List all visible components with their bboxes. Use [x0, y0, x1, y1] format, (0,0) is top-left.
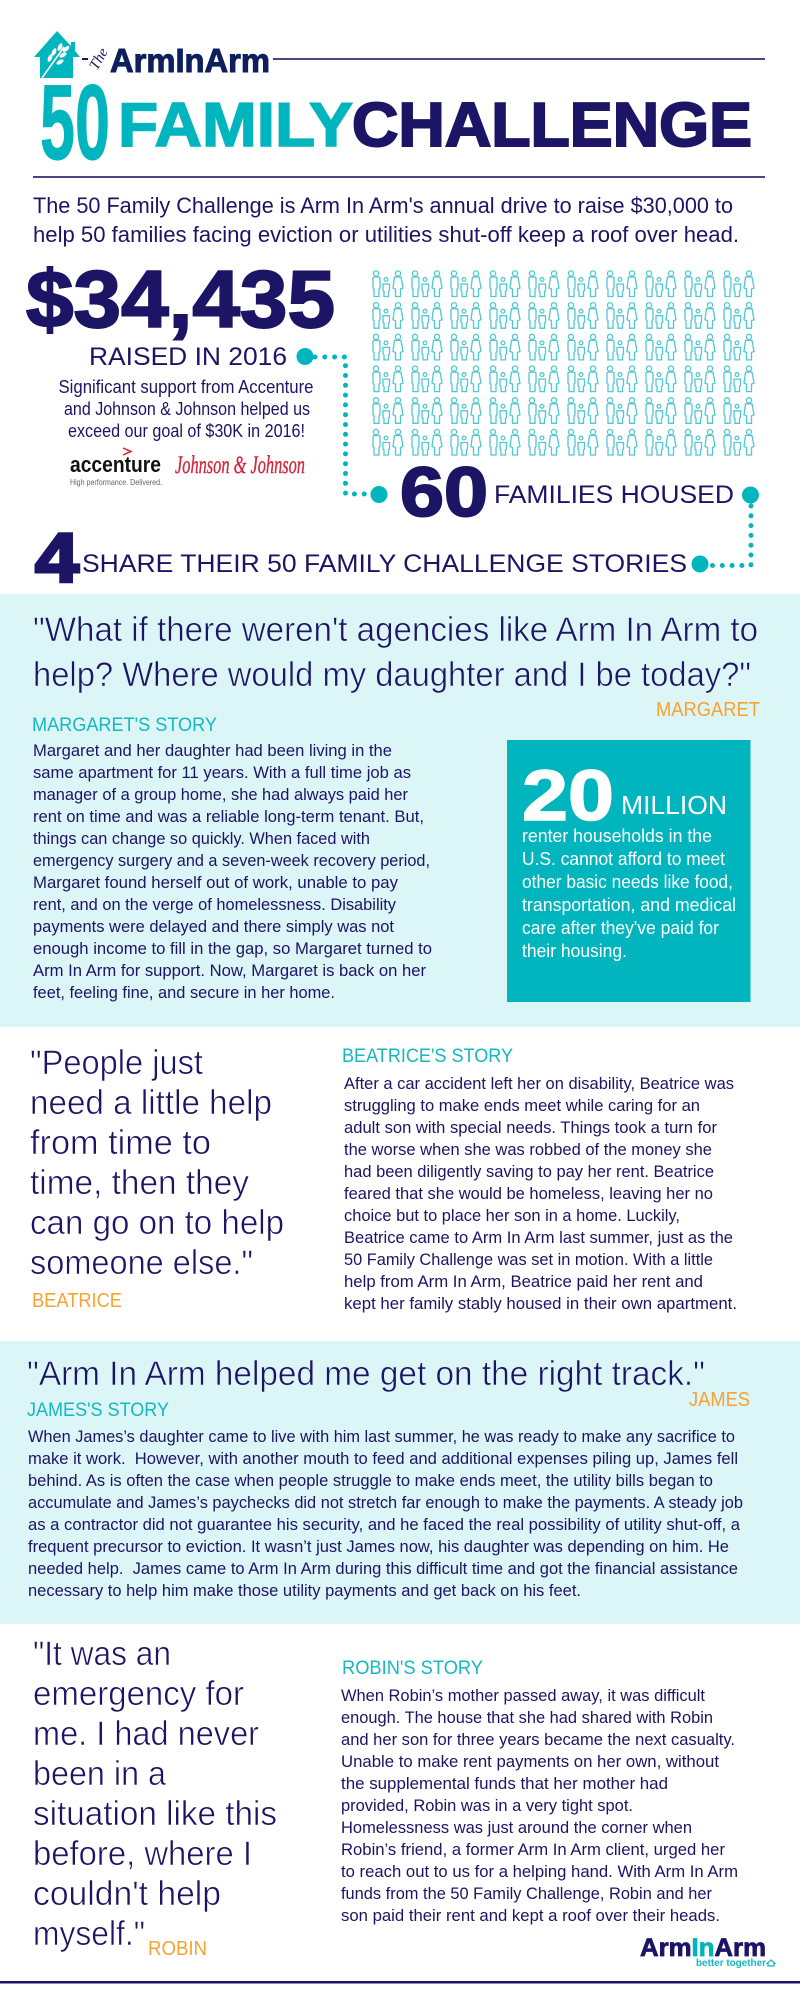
intro text: help 50 families facing eviction or utilities shut-off keep a roof over head.: [33, 222, 739, 247]
big 50: 50: [40, 62, 110, 182]
heading: James's story: JAMES'S STORY: [27, 1400, 169, 1421]
story text: Margaret: payments were delayed and there simply was not: [33, 918, 394, 936]
CHALLENGE: CHALLENGE: [352, 91, 752, 160]
callout: 20 million: transportation, and medical: [522, 895, 736, 915]
attribution: Beatrice: BEATRICE: [32, 1290, 122, 1312]
story text: James: frequent precursor to eviction. It wasn’t just James now, his daughter was depending on him. He: [28, 1538, 729, 1556]
story text: James: accumulate and James’s paychecks did not stretch far enough to make the payments. A steady job: [28, 1494, 743, 1512]
connector: raised to families: [296, 348, 388, 503]
callout: 20 million: their housing.: [522, 941, 627, 961]
story text: Beatrice: feared that she would be homeless, leaving her no: [344, 1185, 713, 1203]
story text: Beatrice: help from Arm In Arm, Beatrice paid her rent and: [344, 1273, 703, 1291]
quote: Margaret: "What if there weren't agencies like Arm In Arm to: [33, 611, 758, 649]
story text: James: as a contractor did not guarantee his security, and he faced the real possibility of utility shut-off, a: [28, 1516, 741, 1534]
callout: 20 million: [507, 740, 750, 1002]
quote: Robin: emergency for: [33, 1675, 244, 1713]
story text: Beatrice: After a car accident left her on disability, Beatrice was: [344, 1075, 734, 1093]
story text: Margaret: rent, and on the verge of homelessness. Disability: [33, 896, 397, 914]
story text: James: needed help. James came to Arm In Arm during this difficult time and got the financial assistance: [28, 1560, 738, 1578]
panel: Margaret: [0, 594, 800, 1027]
story text: Robin: Robin’s friend, a former Arm In Arm client, urged her: [341, 1841, 726, 1859]
story text: James: behind. As is often the case when people struggle to make ends meet, the utility bills began to: [28, 1472, 713, 1490]
story text: Robin: son paid their rent and kept a roof over their heads.: [341, 1907, 720, 1925]
stat: 60 families housed: [400, 453, 734, 531]
logo: Arm In Arm better together: better together: [696, 1957, 766, 1969]
attribution: Margaret: MARGARET: [656, 699, 760, 721]
story text: Beatrice: had been diligently saving to pay her rent. Beatrice: [344, 1163, 714, 1181]
story text: Beatrice: adult son with special needs. Things took a turn for: [344, 1119, 717, 1137]
story text: James: When James’s daughter came to live with him last summer, he was ready to make any sacrifice to: [28, 1428, 735, 1446]
logo: Johnson & Johnson: Johnson & Johnson: [175, 452, 305, 479]
connector: families to stories: [692, 486, 759, 572]
story text: Robin: provided, Robin was in a very tight spot.: [341, 1797, 633, 1815]
sponsor note: exceed our goal of $30K in 2016!: [68, 421, 305, 441]
story text: Margaret: emergency surgery and a seven-week recovery period,: [33, 852, 430, 870]
stat: 4 share their stories: 4: [35, 519, 79, 597]
intro text: The 50 Family Challenge is Arm In Arm's annual drive to raise $30,000 to: [33, 193, 733, 218]
story text: Robin: funds from the 50 Family Challenge, Robin and her: [341, 1885, 712, 1903]
quote: Robin: been in a: [33, 1755, 166, 1793]
story text: Robin: [341, 1687, 738, 1925]
story text: James: make it work. However, with another mouth to feed and additional expenses piling up, James fell: [28, 1450, 738, 1468]
story text: Robin: enough. The house that she had shared with Robin: [341, 1709, 713, 1727]
story text: Margaret: manager of a group home, she had always paid her: [33, 786, 408, 804]
story text: Beatrice: choice but to place her son in a home. Luckily,: [344, 1207, 680, 1225]
stat: 4 share their stories: [35, 519, 687, 597]
logo: accenture: [70, 448, 162, 487]
dash: [82, 58, 88, 60]
story text: Robin: Homelessness was just around the corner when: [341, 1819, 692, 1837]
logo: accenture: High performance. Delivered.: [70, 477, 162, 487]
quote: Beatrice: "People just: [30, 1044, 204, 1082]
story text: Beatrice: 50 Family Challenge was set in motion. With a little: [344, 1251, 713, 1269]
quote: Beatrice: from time to: [30, 1124, 211, 1162]
attribution: James: JAMES: [689, 1389, 750, 1411]
story text: Margaret: things can change so quickly. When faced with: [33, 830, 370, 848]
callout: 20 million: U.S. cannot afford to meet: [522, 849, 725, 869]
heading: Robin's story: ROBIN'S STORY: [342, 1658, 483, 1679]
quote: Beatrice: someone else.": [30, 1244, 253, 1282]
sponsor note: [58, 377, 314, 441]
quote: Robin: me. I had never: [33, 1715, 259, 1753]
footer rule: [0, 1981, 800, 1984]
header: 50 Family Challenge masthead: [33, 31, 765, 182]
story text: Robin: to reach out to us for a helping hand. With Arm In Arm: [341, 1863, 738, 1881]
quote: Robin: couldn't help: [33, 1875, 221, 1913]
story text: Beatrice: struggling to make ends meet while caring for an: [344, 1097, 700, 1115]
story text: Margaret: [33, 742, 432, 1002]
story text: Margaret: enough income to fill in the gap, so Margaret turned to: [33, 940, 432, 958]
story text: Beatrice: kept her family stably housed in their own apartment.: [344, 1295, 737, 1313]
quote: Margaret: help? Where would my daughter and I be today?": [33, 656, 751, 694]
quote: Beatrice: [30, 1044, 284, 1282]
quote: Beatrice: can go on to help: [30, 1204, 284, 1242]
quote: James: "Arm In Arm helped me get on the right track.": [27, 1355, 705, 1393]
stat: amount raised: $34,435: [26, 255, 335, 345]
callout: 20 million: other basic needs like food,: [522, 872, 733, 892]
story text: Beatrice: [344, 1075, 737, 1313]
panel: Beatrice: [30, 1044, 737, 1313]
story text: Beatrice: Beatrice came to Arm In Arm last summer, just as the: [344, 1229, 733, 1247]
sponsor note: and Johnson & Johnson helped us: [64, 399, 310, 419]
story text: Margaret: Arm In Arm for support. Now, Margaret is back on her: [33, 962, 427, 980]
top rule: [273, 58, 765, 60]
callout: 20 million: 20: [522, 757, 614, 836]
story text: Beatrice: the worse when she was robbed of the money she: [344, 1141, 712, 1159]
story text: Robin: the supplemental funds that her mother had: [341, 1775, 668, 1793]
story text: James: necessary to help him make those utility payments and get back on his feet.: [28, 1582, 581, 1600]
sponsor note: Significant support from Accenture: [58, 377, 314, 397]
stat: 60 families housed: 60: [400, 453, 488, 531]
stat: 60 families housed: FAMILIES HOUSED: [494, 481, 734, 509]
quote: Robin: [33, 1635, 277, 1953]
quote: Robin: situation like this: [33, 1795, 277, 1833]
story text: Robin: Unable to make rent payments on her own, without: [341, 1753, 719, 1771]
quote: Robin: before, where I: [33, 1835, 252, 1873]
logo wordmark ArmInArm: ArmInArm: [110, 42, 270, 79]
heading: Margaret's story: MARGARET'S STORY: [32, 715, 217, 736]
story text: Margaret: Margaret found herself out of work, unable to pay: [33, 874, 399, 892]
story text: Margaret: Margaret and her daughter had been living in the: [33, 742, 392, 760]
quote: Beatrice: time, then they: [30, 1164, 249, 1202]
callout: 20 million: renter households in the: [522, 826, 712, 846]
story text: Robin: and her son for three years became the next casualty.: [341, 1731, 735, 1749]
callout: 20 million: MILLION: [621, 790, 727, 820]
icon: house with wheat: [34, 31, 80, 78]
the script word: The: [87, 45, 112, 73]
quote: Robin: "It was an: [33, 1635, 171, 1673]
quote: Margaret: [33, 611, 758, 694]
panel: Robin: [33, 1635, 738, 1960]
story text: Margaret: rent on time and was a reliable long-term tenant. But,: [33, 808, 424, 826]
story text: Margaret: same apartment for 11 years. With a full time job as: [33, 764, 411, 782]
FAMILY: FAMILY: [118, 91, 353, 160]
logo: Arm In Arm better together: ArmInArm: [640, 1934, 766, 1962]
header rule: [33, 176, 765, 178]
stat: amount raised: RAISED IN 2016: [89, 343, 287, 371]
pictogram: 60 families: [373, 271, 754, 455]
logo: accenture: accenture: [70, 452, 161, 477]
quote: Beatrice: need a little help: [30, 1084, 272, 1122]
quote: Robin: myself.": [33, 1915, 145, 1953]
story text: James: [28, 1428, 743, 1600]
heading: Beatrice's story: BEATRICE'S STORY: [342, 1046, 513, 1067]
stat: 4 share their stories: SHARE THEIR 50 FAMILY CHALLENGE STORIES: [82, 550, 687, 578]
story text: Robin: When Robin’s mother passed away, it was difficult: [341, 1687, 705, 1705]
panel: James: [0, 1341, 800, 1624]
intro text: [33, 193, 739, 247]
attribution: Robin: ROBIN: [148, 1938, 207, 1960]
callout: 20 million: care after they've paid for: [522, 918, 719, 938]
story text: Margaret: feet, feeling fine, and secure in her home.: [33, 984, 335, 1002]
